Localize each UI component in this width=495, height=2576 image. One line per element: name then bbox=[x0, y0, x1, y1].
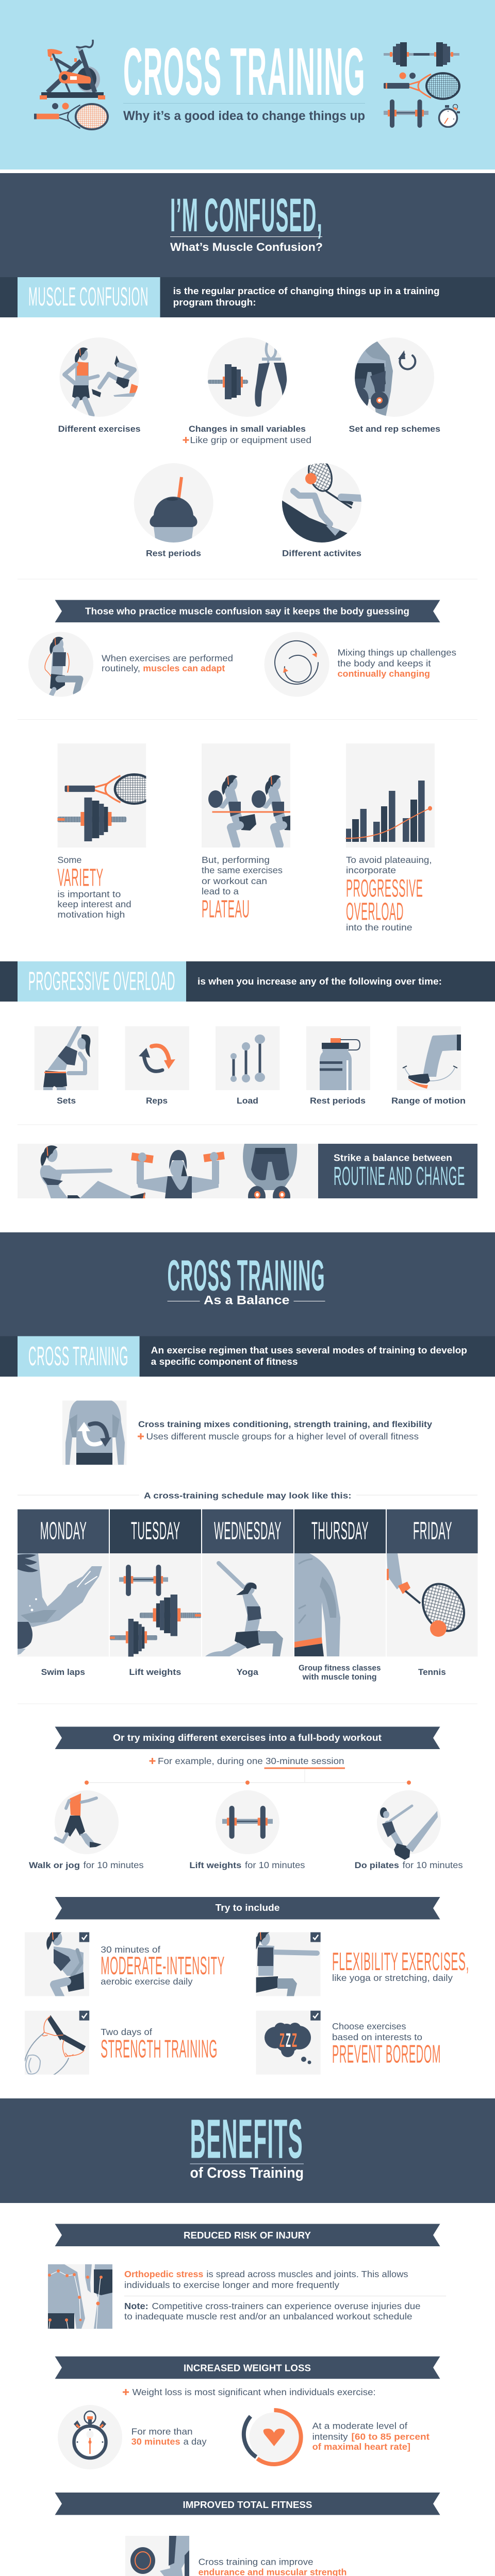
text: variety: Some bbox=[57, 855, 81, 865]
section header: cross training as a balance: As a Balance bbox=[204, 1293, 290, 1307]
ribbon: improved total fitness bbox=[55, 2493, 440, 2515]
panel: flexibility exercises bbox=[254, 1930, 469, 1996]
illustration: dumbbell and barbells bbox=[110, 1553, 202, 1657]
schedule column: Friday bbox=[386, 1510, 477, 1677]
illustration: racket and barbell bbox=[57, 743, 154, 848]
ribbon: keeps the body guessing: Those who practice muscle confusion say it keeps the body guessing bbox=[85, 606, 409, 616]
text: 30 minutes a day bbox=[131, 2427, 207, 2447]
text: orthopedic stress: Competitive cross-trainers can experience overuse injuries due bbox=[152, 2301, 421, 2311]
panel: reps bbox=[125, 1026, 189, 1106]
section header: cross training as a balance bbox=[0, 1232, 495, 1336]
text: orthopedic stress bbox=[124, 2269, 446, 2321]
text: endurance and strength: Cross training can improve bbox=[199, 2557, 314, 2567]
text: strength training bbox=[101, 2027, 218, 2063]
ribbon: increased weight loss: INCREASED WEIGHT LOSS bbox=[184, 2363, 311, 2374]
panel: plateau bbox=[202, 743, 290, 918]
schedule column: Thursday: THURSDAY bbox=[311, 1518, 369, 1545]
icon: thought cloud: Z bbox=[279, 2030, 285, 2052]
text: plateau: PLATEAU bbox=[202, 895, 250, 923]
heading: schedule: A cross-training schedule may look like this: bbox=[144, 1491, 352, 1500]
text: continually changing bbox=[337, 647, 456, 679]
bar chart: rising bars with trend curve bbox=[346, 743, 435, 848]
text: continually changing: Mixing things up challenges bbox=[337, 647, 456, 657]
text: cross training mixes: Cross training mixes conditioning, strength training, and flexibility bbox=[138, 1420, 433, 1429]
text: 30 minutes a day: a day bbox=[184, 2436, 207, 2447]
panel: rest periods bbox=[134, 463, 213, 543]
section header: benefits: BENEFITS bbox=[190, 2108, 303, 2170]
text: muscles can adapt: When exercises are performed bbox=[102, 653, 233, 664]
text: muscles can adapt: routinely, bbox=[102, 663, 140, 673]
panel: moderate intensity bbox=[25, 1930, 225, 1998]
panel: changes in small variables bbox=[207, 337, 287, 417]
ribbon: full-body workout bbox=[55, 1727, 440, 1749]
schedule column: Monday: MONDAY bbox=[40, 1518, 87, 1545]
text: prevent boredom bbox=[332, 2021, 441, 2068]
label: lift weights: Lift weights bbox=[189, 1861, 241, 1870]
text: variety: motivation high bbox=[57, 909, 125, 920]
icon: racket with orange strings bbox=[34, 103, 108, 129]
text: prevent boredom: Choose exercises bbox=[332, 2021, 406, 2031]
text: plateau: lead to a bbox=[202, 886, 239, 896]
text: flexibility exercises bbox=[332, 1948, 469, 1983]
text: orthopedic stress: Note: bbox=[124, 2301, 148, 2311]
text: MODERATE-INTENSITY bbox=[101, 1952, 225, 1980]
text: plateau: But, performing bbox=[202, 855, 270, 865]
section header: I'm confused: What’s Muscle Confusion? bbox=[170, 241, 323, 253]
text: flexibility exercises: like yoga or stretching, daily bbox=[332, 1973, 453, 1983]
text: strength training: Two days of bbox=[101, 2027, 152, 2037]
text: variety bbox=[57, 855, 131, 920]
ribbon: improved total fitness: IMPROVED TOTAL FITNESS bbox=[183, 2500, 312, 2510]
label: rest periods: Rest periods bbox=[310, 1096, 366, 1106]
label: lift weights: for 10 minutes bbox=[245, 1860, 305, 1870]
label: sets: Sets bbox=[57, 1096, 76, 1106]
panel: progressive overload bbox=[346, 743, 435, 933]
label: different activities: Different activites bbox=[282, 549, 361, 558]
section header: benefits bbox=[0, 2098, 495, 2203]
illustration: tennis bbox=[386, 1553, 477, 1657]
label: walk or jog bbox=[29, 1860, 144, 1870]
text: orthopedic stress: individuals to exercise longer and more frequently bbox=[124, 2280, 339, 2290]
hero banner bbox=[0, 0, 495, 170]
text: plateau bbox=[202, 855, 283, 923]
text: variety: keep interest and bbox=[57, 899, 131, 909]
label: group fitness classes bbox=[299, 1664, 381, 1682]
illustration: squatting women with medicine balls bbox=[202, 743, 300, 848]
definition band: muscle confusion bbox=[0, 277, 495, 317]
text: 30-minute session example: For example, during one 30-minute session bbox=[158, 1756, 344, 1766]
label: rest periods: Rest periods bbox=[146, 549, 201, 558]
panel: set and rep schemes bbox=[353, 337, 434, 417]
definition band: muscle confusion: is the regular practice of changing things up in a training bbox=[173, 286, 440, 296]
section header: I'm confused bbox=[0, 173, 495, 277]
text: variety: is important to bbox=[57, 889, 121, 899]
text: muscles can adapt bbox=[102, 653, 233, 673]
definition band: progressive overload: PROGRESSIVE OVERLOAD bbox=[28, 967, 175, 996]
label: changes in small variables: Changes in small variables bbox=[189, 425, 306, 434]
text: endurance and strength bbox=[199, 2557, 346, 2576]
label: swim laps: Swim laps bbox=[41, 1668, 85, 1677]
text: cross training mixes: Uses different muscle groups for a higher level of overall fitness bbox=[146, 1431, 419, 1442]
label: reps: Reps bbox=[146, 1096, 168, 1106]
label: load: Load bbox=[237, 1096, 258, 1106]
label: walk or jog: Walk or jog bbox=[29, 1861, 80, 1870]
label: yoga: Yoga bbox=[237, 1668, 259, 1677]
text: progressive overload: To avoid plateauing, bbox=[346, 855, 432, 865]
timeline connector bbox=[85, 1769, 411, 1785]
section header: benefits: of Cross Training bbox=[190, 2165, 304, 2181]
schedule column: Thursday bbox=[294, 1510, 386, 1682]
text: moderate intensity bbox=[101, 1944, 225, 1987]
icon: stopwatch bbox=[58, 2405, 122, 2469]
panel: walk or jog bbox=[29, 1790, 144, 1870]
label: range of motion: Range of motion bbox=[391, 1096, 466, 1106]
definition band: cross training: An exercise regimen that uses several modes of training to develop bbox=[151, 1345, 467, 1355]
definition band: progressive overload bbox=[0, 961, 495, 1002]
icon: stopwatch bbox=[439, 104, 460, 127]
text: progressive overload bbox=[346, 855, 432, 933]
definition band: cross training: a specific component of fitness bbox=[151, 1357, 298, 1367]
definition band: cross training: CROSS TRAINING bbox=[28, 1342, 128, 1371]
panel: load bbox=[216, 1026, 279, 1106]
icon: dumbbell bbox=[384, 99, 428, 128]
panel: muscles can adapt bbox=[28, 632, 93, 697]
icon: heart-rate ring bbox=[244, 2410, 301, 2464]
label: different exercises: Different exercises bbox=[58, 425, 141, 434]
text: 30 minutes a day: For more than bbox=[131, 2427, 193, 2437]
schedule column: Tuesday: TUESDAY bbox=[131, 1518, 180, 1545]
label: group fitness classes: Group fitness classes bbox=[299, 1664, 381, 1672]
text: moderate level of intensity bbox=[312, 2420, 430, 2452]
icon: thought cloud bbox=[265, 2023, 311, 2064]
schedule column: Tuesday bbox=[110, 1510, 202, 1677]
text: variety: VARIETY bbox=[57, 865, 104, 892]
icon: barbell bbox=[384, 42, 459, 66]
panel: rest periods bottle bbox=[306, 1026, 370, 1106]
text: moderate level of intensity: of maximal heart rate] bbox=[312, 2442, 410, 2452]
ribbon: full-body workout: Or try mixing different exercises into a full-body workout bbox=[113, 1733, 382, 1743]
ribbon: keeps the body guessing bbox=[55, 600, 440, 622]
illustration: arm with weight plate bbox=[125, 2536, 190, 2576]
panel: prevent boredom bbox=[256, 2011, 441, 2075]
label: walk or jog: for 10 minutes bbox=[84, 1860, 144, 1870]
label: changes in small variables: Like grip or equipment used bbox=[190, 435, 311, 445]
ribbon: increased weight loss bbox=[55, 2357, 440, 2379]
panel: strength training bbox=[25, 2011, 218, 2076]
text: routine and change: Strike a balance between bbox=[334, 1153, 452, 1163]
text: plateau: the same exercises bbox=[202, 865, 283, 875]
panel: different exercises bbox=[60, 337, 139, 417]
schedule column: Wednesday bbox=[202, 1510, 293, 1677]
label: do pilates bbox=[355, 1860, 463, 1870]
definition band: muscle confusion: MUSCLE CONFUSION bbox=[28, 282, 148, 311]
label: lift weights bbox=[189, 1860, 305, 1870]
text: 30-minute session example bbox=[150, 1756, 345, 1769]
panel: routine and change banner bbox=[18, 1144, 477, 1198]
text: moderate level of intensity: intensity bbox=[312, 2431, 348, 2442]
label: group fitness classes: with muscle toning bbox=[302, 1673, 377, 1682]
text: 30 minutes a day: 30 minutes bbox=[131, 2436, 180, 2447]
illustration: male torso bbox=[294, 1553, 386, 1657]
text: prevent boredom: based on interests to bbox=[332, 2032, 422, 2042]
label: set and rep schemes: Set and rep schemes bbox=[349, 425, 440, 434]
ribbon: try to include bbox=[55, 1897, 440, 1920]
text: continually changing: continually changing bbox=[337, 669, 430, 679]
ribbon: try to include: Try to include bbox=[216, 1903, 279, 1913]
panel: range of motion bbox=[391, 1026, 466, 1106]
text: progressive overload: OVERLOAD bbox=[346, 899, 404, 926]
text: moderate intensity: 30 minutes of bbox=[101, 1944, 160, 1955]
text: orthopedic stress: Orthopedic stress bbox=[124, 2269, 204, 2279]
panel: continually changing bbox=[265, 632, 329, 697]
panel: variety bbox=[57, 743, 154, 920]
label: do pilates: Do pilates bbox=[355, 1861, 399, 1870]
panel: sets bbox=[35, 1025, 98, 1106]
illustration: yoga lunge bbox=[202, 1553, 293, 1657]
ribbon: reduced risk of injury bbox=[55, 2224, 440, 2246]
icon: exercise bike bbox=[40, 40, 105, 99]
panel: lift weights bbox=[189, 1790, 305, 1870]
icon: thought cloud: Z bbox=[286, 2030, 291, 2052]
text: progressive overload: into the routine bbox=[346, 922, 412, 933]
text: orthopedic stress: is spread across muscles and joints. This allows bbox=[206, 2269, 408, 2279]
text: weight loss note: Weight loss is most significant when individuals exercise: bbox=[133, 2387, 376, 2397]
label: lift weights: Lift weights bbox=[129, 1668, 181, 1677]
label: do pilates: for 10 minutes bbox=[403, 1860, 463, 1870]
text: STRENGTH TRAINING bbox=[101, 2036, 218, 2063]
text: moderate level of intensity: [60 to 85 percent bbox=[352, 2431, 430, 2442]
text: orthopedic stress: to inadequate muscle rest and/or an unbalanced workout schedule bbox=[124, 2311, 412, 2321]
text: progressive overload: incorporate bbox=[346, 865, 396, 875]
icon: thought cloud: Z bbox=[292, 2030, 297, 2052]
panel: do pilates bbox=[355, 1790, 463, 1870]
label: tennis: Tennis bbox=[418, 1668, 446, 1677]
definition band: muscle confusion: program through: bbox=[173, 297, 256, 308]
panel: different activities bbox=[282, 463, 361, 543]
text: moderate level of intensity: At a moderate level of bbox=[312, 2420, 407, 2431]
text: WEDNESDAY bbox=[214, 1518, 282, 1545]
illustration: swimmer bbox=[18, 1553, 109, 1657]
label: changes in small variables bbox=[183, 425, 311, 445]
text: routine and change bbox=[334, 1153, 465, 1191]
text: moderate intensity: aerobic exercise daily bbox=[101, 1976, 193, 1987]
icon: racket with dark strings bbox=[384, 72, 459, 99]
text: cross training mixes bbox=[138, 1420, 433, 1442]
text: plateau: or workout can bbox=[202, 876, 267, 886]
definition band: progressive overload: is when you increase any of the following over time: bbox=[197, 976, 442, 987]
illustration: torso with rotating arrows bbox=[62, 1400, 127, 1465]
text: muscles can adapt: muscles can adapt bbox=[143, 663, 225, 673]
definition band: cross training bbox=[0, 1336, 495, 1377]
ribbon: reduced risk of injury: REDUCED RISK OF INJURY bbox=[184, 2230, 311, 2241]
subtitle: Why it’s a good idea to change things up bbox=[123, 109, 365, 123]
text: continually changing: the body and keeps it bbox=[337, 658, 431, 668]
schedule column: Monday bbox=[18, 1510, 109, 1677]
illustration: body joints bbox=[48, 2264, 112, 2329]
